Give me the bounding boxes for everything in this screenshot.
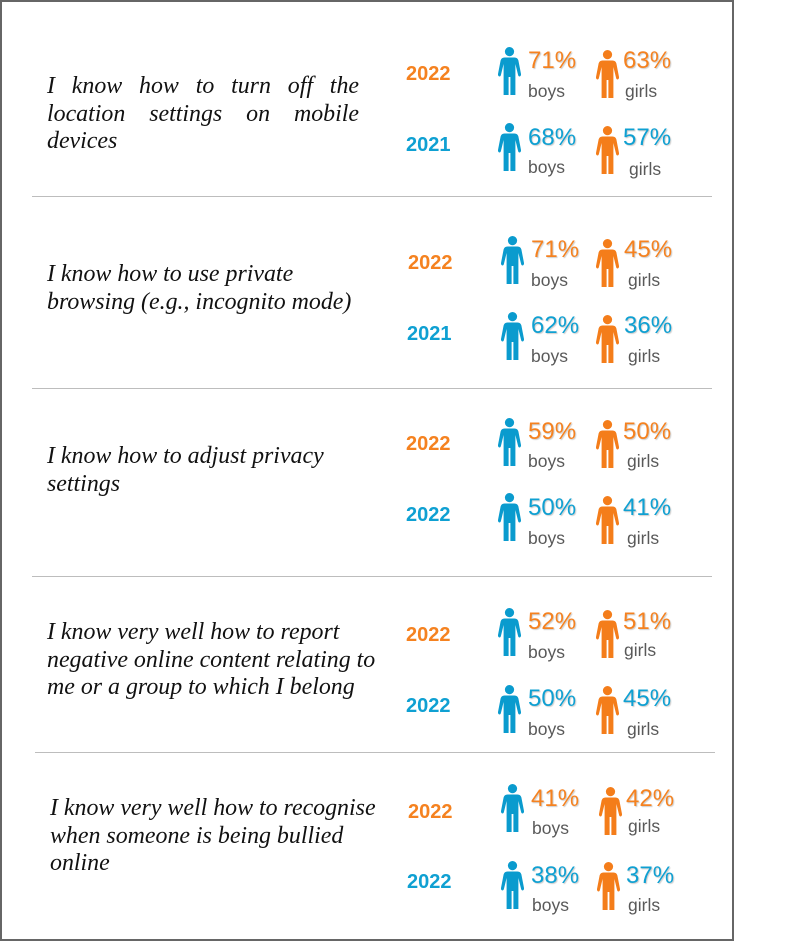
question text: privacy settings: I know how to adjust privacy xyxy=(47,443,324,469)
panel: private browsing xyxy=(46,236,672,366)
icon: girl first row xyxy=(596,610,619,658)
girls first value: 51% xyxy=(623,608,671,635)
boys label: boys xyxy=(528,719,565,739)
boys second value: 50% xyxy=(528,685,576,712)
girls first value: 50% xyxy=(623,418,671,445)
girls label: girls xyxy=(627,719,659,739)
girls label: girls xyxy=(625,81,657,101)
icon: boy 2021 xyxy=(498,123,521,171)
boys second value: 50% xyxy=(528,494,576,521)
girls label: girls xyxy=(628,816,660,836)
girls label: girls xyxy=(629,159,661,179)
question text: recognise bullying: I know very well how to recognise xyxy=(50,795,376,821)
icon: boy 2022 xyxy=(498,47,521,95)
boys label: boys xyxy=(531,270,568,290)
question text: recognise bullying: when someone is being bullied xyxy=(50,822,343,848)
panel: location settings xyxy=(46,47,672,179)
question text: recognise bullying xyxy=(50,795,376,876)
boys 2022 value: 71% xyxy=(528,47,576,74)
icon: boy first row xyxy=(501,784,524,832)
boys label: boys xyxy=(528,81,565,101)
question text: report negative content: negative online content relating to xyxy=(47,646,375,672)
question text: location settings: devices xyxy=(47,128,117,154)
question text: recognise bullying: online xyxy=(50,850,110,876)
icon: girl first row xyxy=(596,420,619,468)
girls second value: 45% xyxy=(623,685,671,712)
icon: girl first row xyxy=(599,787,622,835)
girls second value: 37% xyxy=(626,862,674,889)
boys label: boys xyxy=(528,157,565,177)
icon: boy 2021 xyxy=(501,312,524,360)
year 2022 second: 2022 xyxy=(407,871,452,893)
girls second value: 41% xyxy=(623,494,671,521)
question text: private browsing: browsing (e.g., incognito mode) xyxy=(47,288,351,314)
year 2021: 2021 xyxy=(406,134,450,156)
question text: privacy settings xyxy=(46,443,324,496)
boys 2021 value: 62% xyxy=(531,312,579,339)
question text: location settings: location settings on mobile xyxy=(47,100,359,126)
boys label: boys xyxy=(532,895,569,915)
panel: recognise bullying xyxy=(50,784,674,915)
girls first value: 42% xyxy=(626,785,674,812)
boys 2021 value: 68% xyxy=(528,124,576,151)
boys first value: 59% xyxy=(528,418,576,445)
year 2022 second: 2022 xyxy=(406,504,450,526)
question text: report negative content: me or a group to which I belong xyxy=(47,674,355,700)
boys second value: 38% xyxy=(531,862,579,889)
icon: boy 2022 xyxy=(501,236,524,284)
icon: girl second row xyxy=(596,686,619,734)
girls 2021 value: 36% xyxy=(624,312,672,339)
girls 2022 value: 63% xyxy=(623,47,671,74)
girls label: girls xyxy=(624,640,656,660)
icon: girl second row xyxy=(597,862,620,910)
girls label: girls xyxy=(628,346,660,366)
icon: girl 2022 xyxy=(596,239,619,287)
year 2022: 2022 xyxy=(406,63,450,85)
question text: private browsing: I know how to use private xyxy=(47,261,293,287)
year 2022: 2022 xyxy=(406,433,450,455)
boys label: boys xyxy=(532,818,569,838)
icon: girl 2021 xyxy=(596,126,619,174)
year 2022: 2022 xyxy=(408,801,452,823)
icon: boy first row xyxy=(498,608,521,656)
icon: girl second row xyxy=(596,496,619,544)
girls label: girls xyxy=(628,270,660,290)
year 2022: 2022 xyxy=(406,624,450,646)
girls label: girls xyxy=(627,528,659,548)
icon: boy second row xyxy=(501,861,524,909)
girls label: girls xyxy=(627,451,659,471)
boys first value: 52% xyxy=(528,608,576,635)
question text: report negative content xyxy=(46,619,375,700)
question text: location settings: I know how to turn off the xyxy=(47,73,359,99)
boys label: boys xyxy=(528,528,565,548)
boys 2022 value: 71% xyxy=(531,236,579,263)
icon: boy second row xyxy=(498,685,521,733)
panel: privacy settings xyxy=(46,418,672,548)
boys label: boys xyxy=(531,346,568,366)
year 2022 second: 2022 xyxy=(406,695,450,717)
girls label: girls xyxy=(628,895,660,915)
question text: private browsing xyxy=(46,261,351,314)
year 2022: 2022 xyxy=(408,252,452,274)
girls 2022 value: 45% xyxy=(624,236,672,263)
panel: report negative content xyxy=(46,608,672,739)
year 2021: 2021 xyxy=(407,323,452,345)
question text: report negative content: I know very well how to report xyxy=(47,619,339,645)
boys label: boys xyxy=(528,451,565,471)
icon: girl 2021 xyxy=(596,315,619,363)
icon: boy first row xyxy=(498,418,521,466)
question text: privacy settings: settings xyxy=(47,470,120,496)
icon: girl 2022 xyxy=(596,50,619,98)
icon: boy second row xyxy=(498,493,521,541)
girls 2021 value: 57% xyxy=(623,124,671,151)
question text: location settings xyxy=(46,73,359,154)
boys label: boys xyxy=(528,642,565,662)
boys first value: 41% xyxy=(531,785,579,812)
